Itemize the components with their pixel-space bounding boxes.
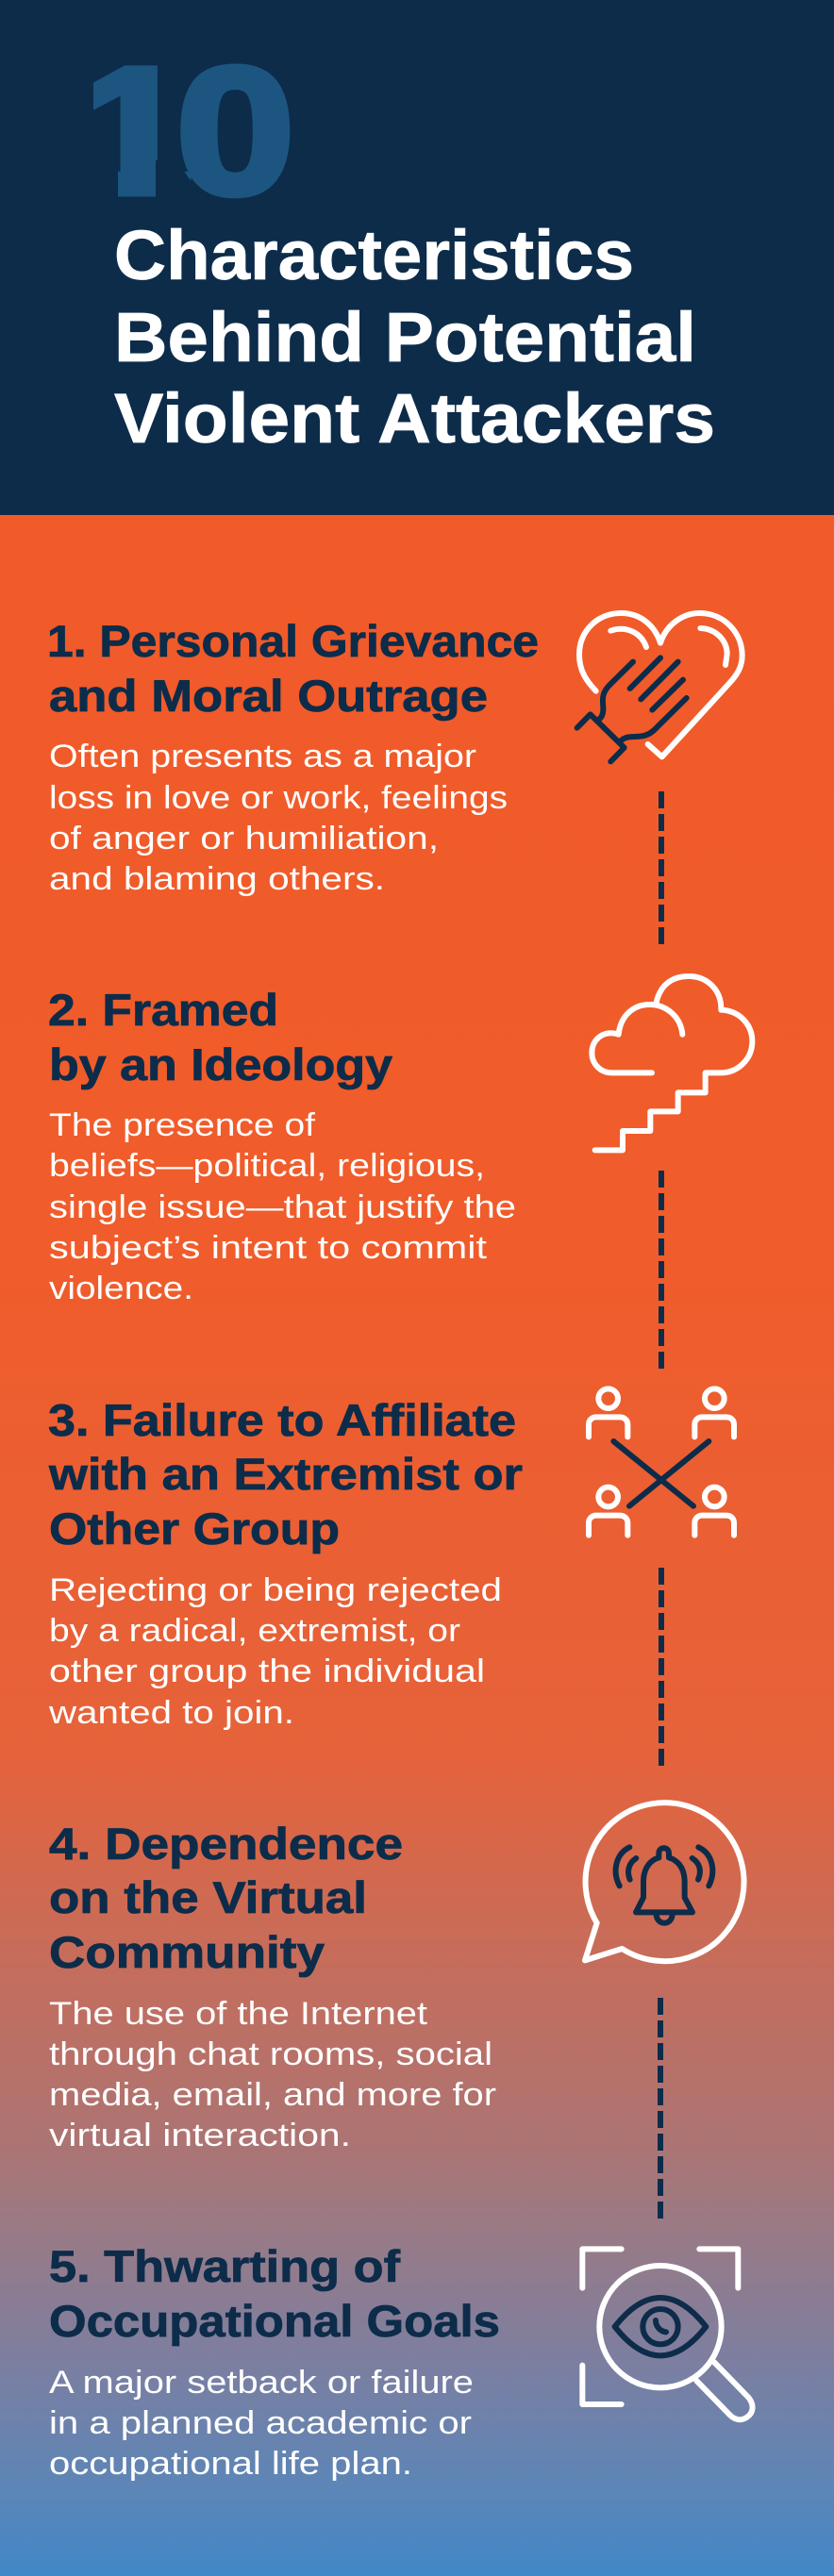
heading 2	[48, 985, 392, 1089]
title: Characteristics	[114, 216, 634, 294]
text block 4: media, email, and more for	[49, 2077, 496, 2113]
text block 4: through chat rooms, social	[49, 2036, 492, 2072]
panel: characteristic 3	[48, 1388, 734, 1766]
heading 2: by an Ideology	[49, 1039, 392, 1089]
heading 1: and Moral Outrage	[49, 671, 488, 721]
text block 3: Rejecting or being rejected	[49, 1572, 502, 1608]
connector 2	[659, 1171, 664, 1369]
heading 4: on the Virtual	[49, 1872, 367, 1922]
heading 1: 1. Personal Grievance	[47, 616, 539, 666]
text block 2	[49, 1107, 516, 1306]
text block 3	[48, 1572, 502, 1731]
heading 4: Community	[49, 1927, 325, 1977]
heading 3: Other Group	[49, 1504, 340, 1554]
heading 2: 2. Framed	[48, 985, 278, 1035]
heading 3: 3. Failure to Affiliate	[48, 1395, 516, 1445]
panel: characteristic 5	[49, 2241, 753, 2482]
heading 3: with an Extremist or	[48, 1449, 523, 1499]
text block 1	[49, 739, 508, 897]
heading 1	[47, 616, 539, 721]
heading 5	[49, 2241, 500, 2346]
text block 2: single issue—that justify the	[49, 1189, 516, 1225]
text block 4: The use of the Internet	[49, 1996, 428, 2032]
text block 3: other group the individual	[49, 1654, 485, 1689]
heading 4: 4. Dependence	[49, 1819, 403, 1869]
text block 5: in a planned academic or	[49, 2405, 472, 2441]
text block 4	[49, 1996, 496, 2153]
heading 4	[49, 1819, 403, 1977]
text block 1: loss in love or work, feelings	[49, 780, 508, 816]
text block 5: A major setback or failure	[49, 2365, 474, 2401]
text block 2: subject’s intent to commit	[49, 1230, 488, 1266]
text block 5	[49, 2365, 474, 2482]
heading 5: 5. Thwarting of	[49, 2241, 400, 2291]
icon: magnifier with eye	[582, 2249, 753, 2419]
text block 2: violence.	[49, 1271, 193, 1306]
text block 1: Often presents as a major	[49, 739, 476, 774]
text block 1: and blaming others.	[49, 861, 385, 897]
text block 4: virtual interaction.	[49, 2118, 351, 2153]
panel: characteristic 2	[48, 976, 752, 1369]
heading 5: Occupational Goals	[49, 2296, 500, 2346]
panel: header band	[0, 0, 834, 515]
big number 10: 10	[75, 30, 294, 232]
text block 1: of anger or humiliation,	[49, 821, 439, 856]
icon: speech bubble with bell	[585, 1803, 744, 1961]
connector 1	[659, 791, 664, 944]
connector 4	[658, 1998, 663, 2219]
text block 3: by a radical, extremist, or	[49, 1613, 460, 1649]
panel: characteristic 4	[49, 1803, 744, 2219]
title: Violent Attackers	[114, 379, 715, 457]
panel: characteristic 1	[47, 613, 742, 944]
text block 5: occupational life plan.	[49, 2446, 412, 2482]
heading 3	[48, 1395, 523, 1554]
connector 3	[659, 1568, 664, 1766]
text block 2: The presence of	[49, 1107, 316, 1143]
icon: heart with hand	[577, 613, 742, 761]
icon: cloud and stairs	[592, 976, 752, 1150]
title	[114, 216, 715, 457]
text block 3: wanted to join.	[48, 1695, 294, 1731]
text block 2: beliefs—political, religious,	[49, 1148, 485, 1184]
title: Behind Potential	[114, 298, 696, 376]
icon: four people crossed out	[589, 1388, 734, 1536]
